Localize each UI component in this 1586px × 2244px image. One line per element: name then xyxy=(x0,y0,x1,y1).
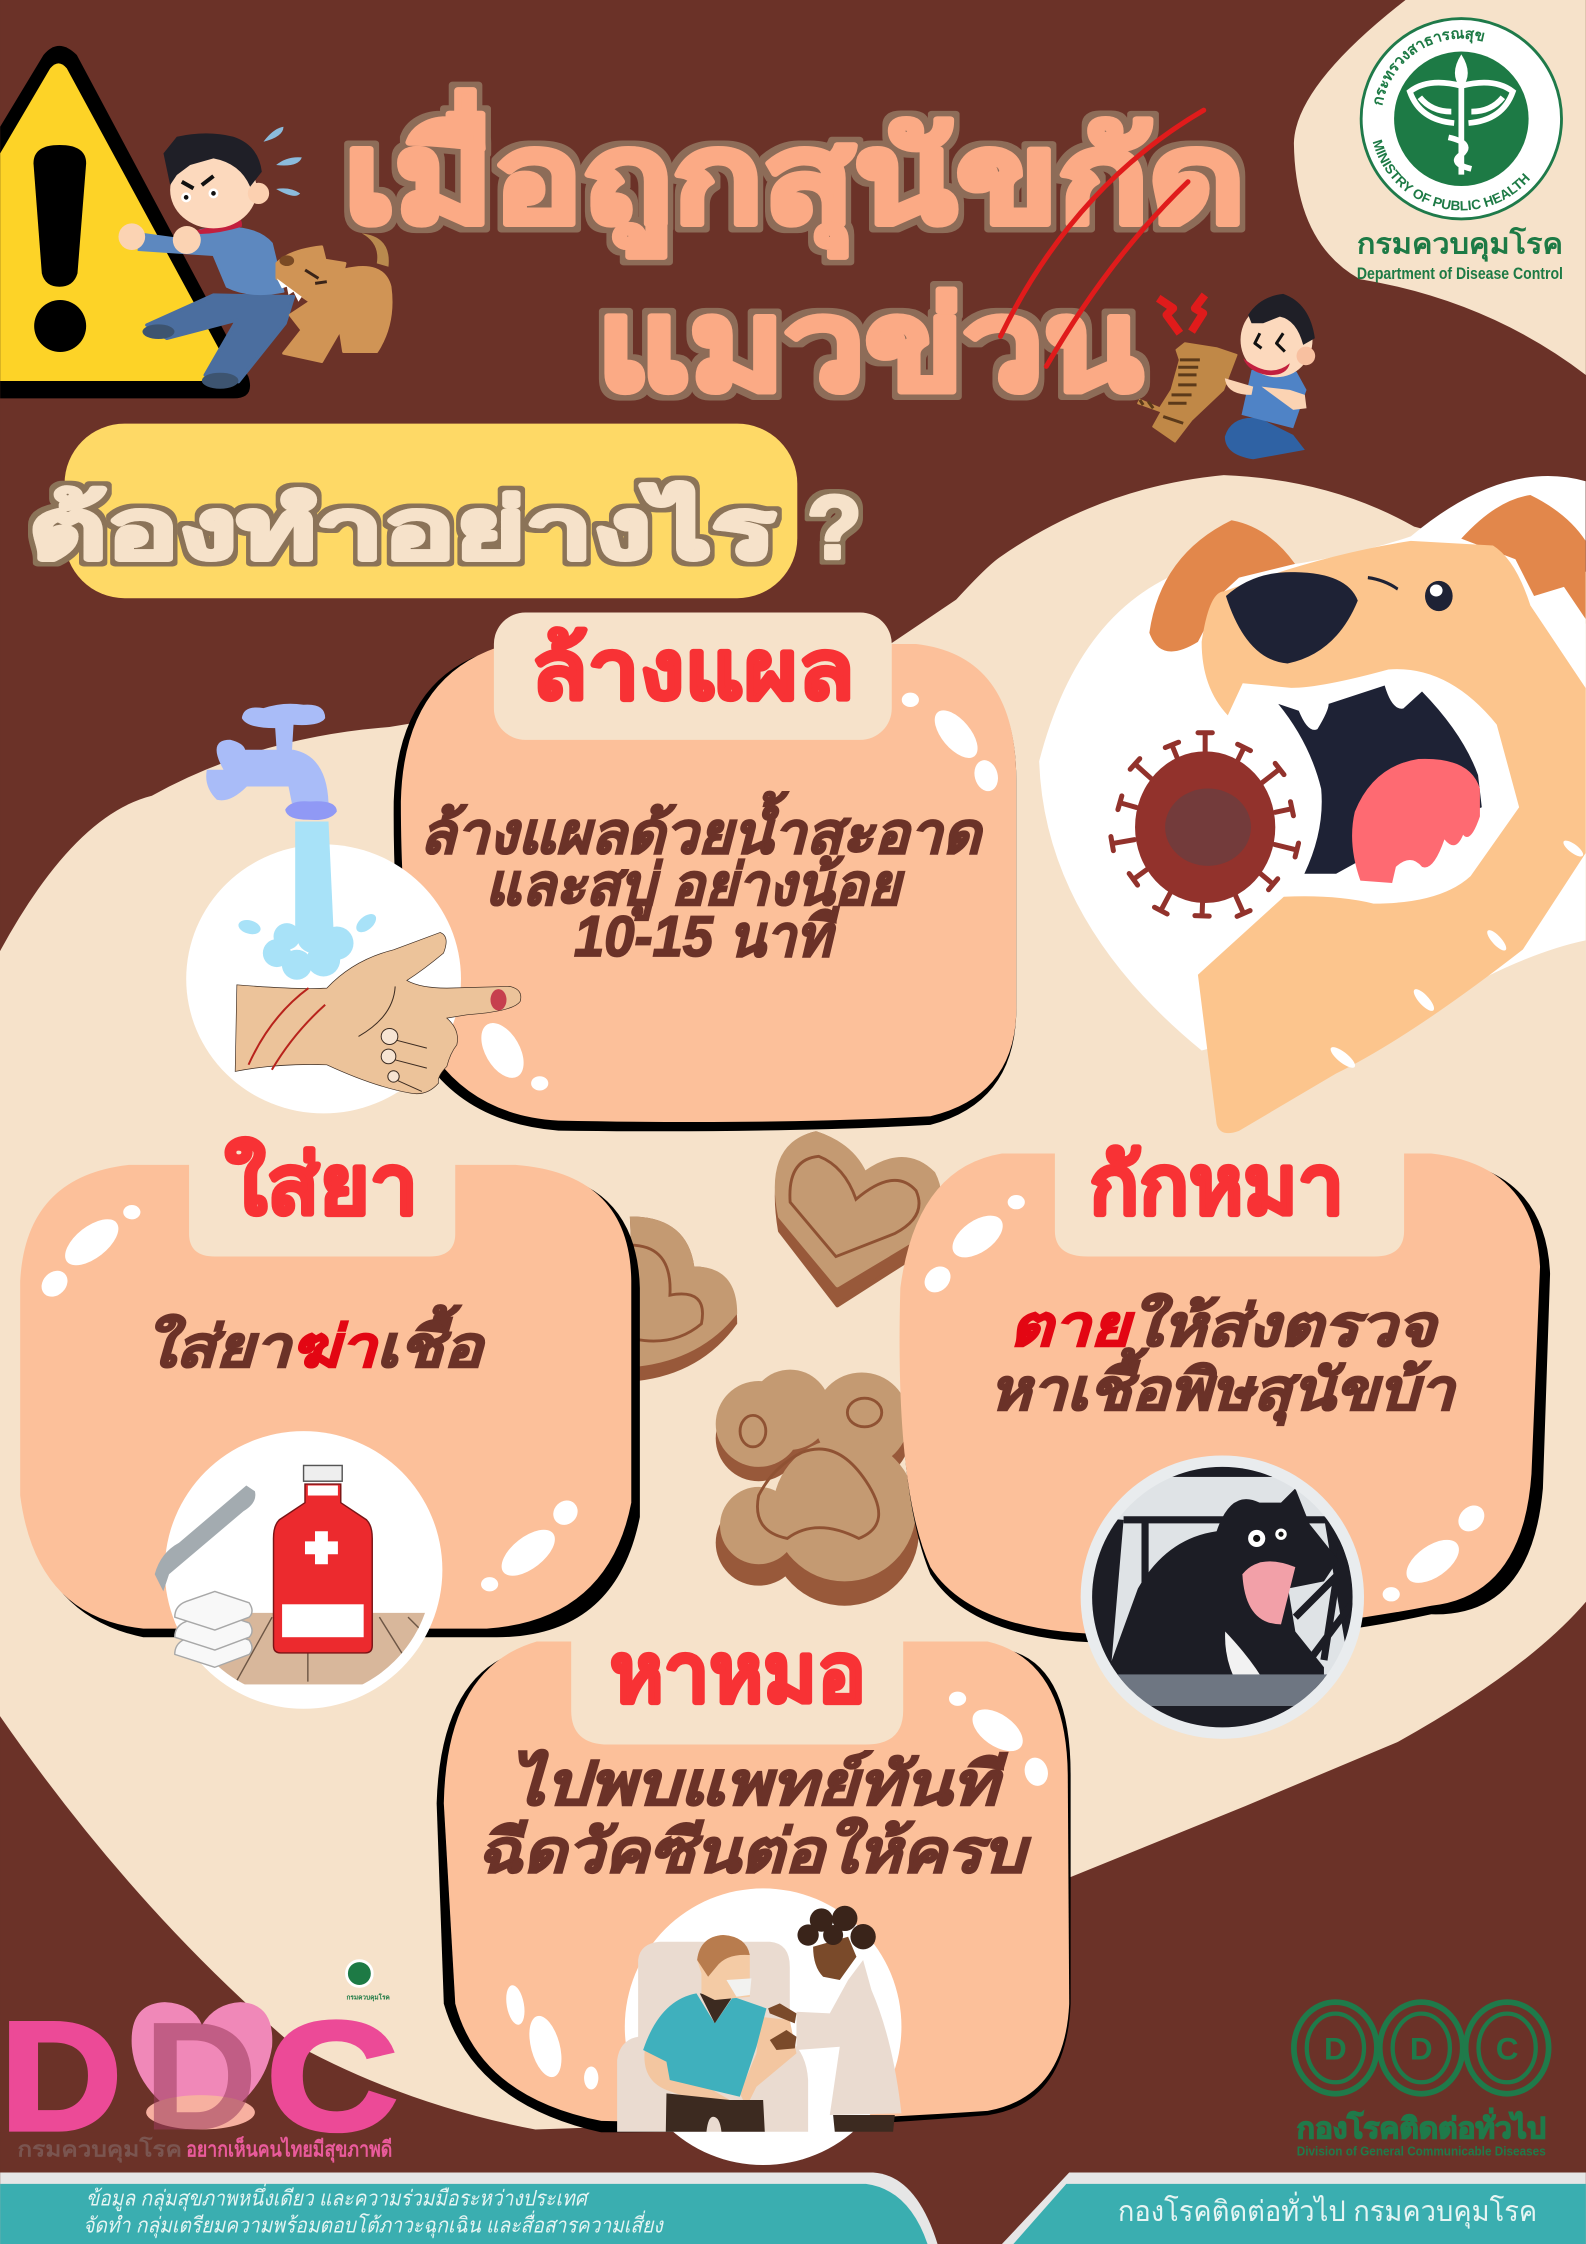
footer right band xyxy=(1002,2172,1586,2244)
cream blob: main background xyxy=(0,475,1586,2130)
footer left band: ข้อมูล กลุ่มสุขภาพหนึ่งเดียว และความร่วมมือระหว่างประเทศ xyxy=(86,2182,590,2211)
logo: DDC pink: กรมควบคุมโรค xyxy=(17,2136,182,2164)
tab xyxy=(494,613,892,740)
icon: antiseptic bottle, tweezers and gauze xyxy=(155,1431,444,1709)
panel: see a doctor: ฉีดวัคซีนต่อให้ครบ xyxy=(477,1817,1031,1885)
illustration: warning sign xyxy=(0,46,250,398)
brown strip masking the panel bottom xyxy=(0,2132,1586,2172)
panel: wash wound xyxy=(394,613,1016,1131)
footer left band xyxy=(0,2172,938,2244)
subtitle: ต้องทำอย่างไร xyxy=(29,482,776,576)
illustration: man scratched by cat xyxy=(1138,294,1315,459)
logo: DDC pink: D xyxy=(0,1990,122,2163)
logo: DDC green: กองโรคติดต่อทั่วไป xyxy=(1297,2108,1546,2145)
question mark: ? xyxy=(807,478,862,577)
logo: small MOPH emblem: กรมควบคุมโรค xyxy=(346,1992,390,2001)
heading: ใส่ยา xyxy=(225,1138,418,1232)
icon: virus xyxy=(1111,733,1299,916)
cookie: paw xyxy=(716,1370,919,1606)
body text: ไปพบแพทย์ทันที xyxy=(510,1750,1008,1818)
tab xyxy=(1055,1139,1404,1257)
body text: ตาย ให้ส่งตรวจ xyxy=(1009,1292,1440,1358)
logo: Ministry of Public Health xyxy=(1360,17,1563,220)
logo: DDC green: D xyxy=(1410,2031,1433,2066)
logo: DDC pink: C xyxy=(266,1990,398,2163)
department name: กรมควบคุมโรค xyxy=(1357,226,1563,261)
panel: observe dog xyxy=(900,1139,1550,1643)
heading: ล้างแผล xyxy=(531,623,855,716)
icon: caged rabid dog xyxy=(1081,1455,1364,1739)
tab xyxy=(189,1149,455,1257)
logo: Ministry of Public Health: กระทรวงสาธารณสุข xyxy=(1374,30,1484,106)
panel: apply antiseptic xyxy=(20,1138,640,1637)
icon: tap and wounded hand xyxy=(186,704,521,1113)
footer right band: กองโรคติดต่อทั่วไป กรมควบคุมโรค xyxy=(1118,2192,1537,2229)
title line 2: แมวข่วน xyxy=(597,275,1142,416)
logo: DDC green: C xyxy=(1496,2031,1518,2066)
body text xyxy=(419,791,983,969)
panel: see a doctor xyxy=(437,1627,1071,2132)
logo: DDC green: D xyxy=(1324,2031,1347,2066)
logo: DDC green xyxy=(1294,2002,1549,2158)
logo: small MOPH emblem xyxy=(346,1961,390,2001)
illustration: man bitten by dog xyxy=(118,127,391,389)
heading: หาหมอ xyxy=(610,1627,866,1720)
panel: observe dog: หาเชื้อพิษสุนัขบ้า xyxy=(989,1348,1457,1426)
cream blob: top-right corner xyxy=(1294,0,1586,375)
footer left band: จัดทำ กลุ่มเตรียมความพร้อมตอบโต้ภาวะฉุกเฉิน และสื่อสารความเสี่ยง xyxy=(83,2210,664,2239)
title line 1: เมื่อถูกสุนัขกัด xyxy=(344,90,1245,257)
body text: และสบู่ อย่างน้อย xyxy=(485,853,905,920)
logo: Ministry of Public Health: MINISTRY OF PUBLIC HEALTH xyxy=(1372,140,1530,210)
logo: DDC pink: D xyxy=(143,1990,258,2163)
body text: ใส่ยา ฆ่า เชื้อ xyxy=(143,1305,485,1380)
yellow pill behind subtitle xyxy=(65,424,797,598)
heading: กักหมา xyxy=(1089,1139,1344,1232)
cookie: heart top xyxy=(777,1133,939,1305)
scratch marks over title xyxy=(1001,110,1204,366)
body text: ล้างแผลด้วยน้ำสะอาด xyxy=(419,791,983,866)
logo: DDC pink xyxy=(0,1990,398,2164)
logo: DDC pink: อยากเห็นคนไทยมีสุขภาพดี xyxy=(186,2135,392,2164)
tab xyxy=(571,1641,903,1745)
department name xyxy=(1357,226,1563,283)
illustration: angry dog with virus xyxy=(1039,476,1586,1133)
illustration: vaccination xyxy=(617,1888,901,2165)
logo: DDC green: Division of General Communicable Diseases xyxy=(1297,2143,1546,2158)
cookie: heart left xyxy=(630,1216,737,1381)
body text: 10-15 นาที xyxy=(574,905,840,969)
